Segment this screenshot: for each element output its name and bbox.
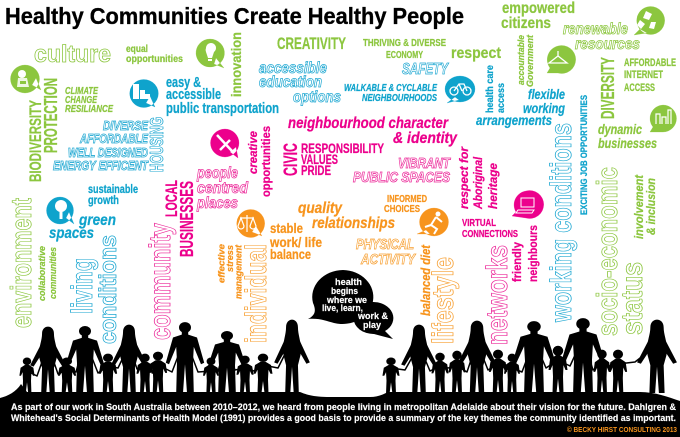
label: culture: culture — [34, 41, 111, 68]
text: walkable and cyclable neighbourhoods: NEIGHBOURHOODS — [362, 92, 437, 104]
callout: health begins speech bubbles: health — [335, 277, 362, 288]
icon: hanger bubble — [547, 45, 576, 74]
text: effective stress management — [216, 243, 244, 299]
text: civic responsibility values pride — [281, 141, 384, 178]
black ground band — [0, 384, 680, 437]
text: equal opportunities — [126, 43, 183, 65]
text: equal opportunities: opportunities — [126, 53, 183, 65]
text: diverse affordable housing: ENERGY EFFICENT — [53, 158, 149, 173]
text: friendly neighbours: friendly — [510, 242, 524, 282]
icon: recycle bubble — [634, 6, 665, 35]
text: effective stress management: effective — [216, 243, 228, 283]
text: easy and accessible public transportation — [166, 75, 279, 117]
text: easy and accessible public transportation: public transportation — [166, 101, 279, 117]
text: footer paragraph — [11, 402, 676, 424]
silhouettes: left group of families holding hands — [19, 320, 310, 393]
text: virtual connections — [462, 218, 518, 240]
label: biodiversity protection: PROTECTION — [41, 78, 61, 153]
label: respect: respect — [451, 45, 502, 62]
text: friendly neighbours: neighbours — [526, 225, 540, 282]
callout: health begins speech bubbles: live, learn, — [322, 303, 363, 314]
text: involvement and inclusion: involvement — [632, 174, 646, 239]
text: creative opportunities — [248, 126, 273, 197]
label: socio-economic status — [592, 167, 649, 336]
text: accountable government: accountable — [516, 35, 526, 85]
text: renewable resources: renewable — [563, 21, 628, 38]
icon: runner bubble — [417, 208, 448, 236]
text: balanced diet: balanced diet — [419, 244, 433, 316]
text: easy and accessible public transportation: easy & — [166, 75, 201, 91]
callout: health begins speech bubbles: play — [363, 320, 382, 331]
label: safety: SAFETY — [402, 61, 449, 78]
icon: bike bubble — [445, 76, 475, 103]
text: civic responsibility values pride: PRIDE — [301, 163, 331, 178]
icon: chart bubble — [650, 105, 676, 132]
text: respect for aboriginal heritage: heritage — [486, 163, 500, 209]
heading: neighbourhood character and identity: neighbourhood character — [288, 115, 449, 132]
text: sustainable growth: growth — [88, 193, 119, 207]
label: housing: HOUSING — [147, 117, 167, 172]
callout: health begins speech bubbles — [308, 270, 393, 339]
text: flexible working arrangements: working — [523, 100, 565, 116]
text: health care access: access — [496, 83, 507, 113]
label: local businesses — [163, 180, 197, 257]
text: stable work life balance — [269, 220, 322, 262]
label: biodiversity protection: BIODIVERSITY — [27, 100, 45, 182]
title: Healthy Communities Create Healthy People — [5, 3, 464, 29]
text: thriving and diverse economy: THRIVING & DIVERSE — [363, 37, 446, 49]
label: green spaces: spaces — [49, 225, 94, 242]
text: stable work life balance: stable — [270, 220, 303, 236]
label: local businesses: LOCAL — [163, 180, 181, 217]
text: flexible working arrangements — [476, 86, 565, 128]
text: involvement and inclusion — [632, 174, 658, 239]
text: climate change resiliance: RESILIANCE — [65, 103, 114, 115]
text: respect for aboriginal heritage: Aboriginal — [471, 156, 485, 210]
text: effective stress management: stress — [225, 245, 236, 272]
text: friendly neighbours — [510, 225, 540, 282]
heading: neighbourhood character and identity — [288, 115, 458, 147]
text: walkable and cyclable neighbourhoods: WALKABLE & CYCLABLE — [344, 82, 438, 94]
text: collaborative communities: communities — [48, 247, 58, 299]
label: empowered citizens: empowered — [502, 0, 575, 17]
icon: laptop bubble — [512, 191, 544, 218]
text: creative opportunities: opportunities — [261, 126, 273, 197]
icon: scales bubble — [237, 209, 265, 238]
text: accessible education options: accessible — [259, 60, 327, 77]
text: civic responsibility values pride: VALUES — [301, 152, 338, 167]
label: green spaces: green — [78, 212, 116, 229]
label: community: community — [144, 223, 177, 340]
text: climate change resiliance: CHANGE — [65, 94, 98, 106]
text: informed choices — [384, 193, 427, 215]
text: sustainable growth: sustainable — [88, 182, 138, 196]
text: flexible working arrangements: flexible — [528, 86, 565, 102]
label: creativity: CREATIVITY — [277, 35, 346, 53]
label: working conditions: working conditions — [545, 123, 578, 323]
text: vibrant public spaces: VIBRANT — [398, 155, 451, 172]
text: diverse affordable housing: DIVERSE — [103, 118, 148, 133]
text: accountable government — [516, 34, 535, 87]
callout: health begins speech bubbles: where we — [326, 295, 367, 306]
label: biodiversity protection — [27, 78, 61, 182]
text: people centred places: places — [196, 195, 238, 212]
label: local businesses: BUSINESSES — [177, 181, 197, 257]
text: effective stress management: management — [234, 244, 244, 299]
text: affordable internet access: ACCESS — [624, 82, 655, 94]
text: dynamic businesses: dynamic — [598, 122, 642, 137]
text: quality relationships — [298, 200, 395, 232]
text: vibrant public spaces — [353, 155, 451, 186]
text: people centred places — [196, 165, 249, 212]
text: virtual connections: VIRTUAL — [462, 218, 496, 229]
text: informed choices: INFORMED — [387, 193, 427, 205]
text: climate change resiliance — [65, 85, 114, 115]
label: lifestyle: lifestyle — [427, 257, 460, 344]
icon: buildings bubble — [130, 80, 158, 108]
icon: lightbulb bubble — [196, 39, 224, 68]
text: collaborative communities — [37, 246, 58, 301]
label: individual: individual — [240, 244, 273, 343]
label: networks: networks — [481, 245, 514, 345]
text: easy and accessible public transportation: accessible — [166, 87, 221, 103]
text: involvement and inclusion: & inclusion — [644, 178, 658, 235]
label: socio-economic status: socio-economic — [592, 167, 624, 336]
text: people centred places: people — [196, 165, 238, 182]
text: thriving and diverse economy — [363, 37, 446, 61]
text: vibrant public spaces: PUBLIC SPACES — [353, 169, 450, 186]
icon: koala bubble — [10, 65, 41, 93]
text: physical activity: PHYSICAL — [356, 236, 414, 253]
text: exciting job opportunities: EXCITING JOB OPPORTUNITIES — [579, 95, 590, 215]
text: accessible education options — [259, 60, 341, 106]
heading: neighbourhood character and identity: & identity — [393, 130, 458, 147]
label: environment: environment — [6, 198, 38, 328]
text: physical activity: ACTIVITY — [360, 251, 417, 268]
label: innovation: innovation — [228, 32, 244, 97]
text: diverse affordable housing — [53, 118, 149, 173]
text: informed choices: CHOICES — [384, 203, 420, 215]
text: creative opportunities: creative — [248, 130, 260, 174]
text: climate change resiliance: CLIMATE — [65, 85, 99, 97]
text: flexible working arrangements: arrangements — [476, 112, 552, 128]
text: diverse affordable housing: AFFORDABLE — [79, 131, 148, 146]
text: renewable resources: resources — [575, 36, 640, 53]
text: accountable government: Government — [525, 34, 535, 87]
text: accessible education options: options — [293, 89, 341, 106]
text: civic responsibility values pride: RESPONSIBILITY — [301, 141, 384, 156]
icon: tree bubble — [47, 197, 74, 224]
label: living conditions: living — [66, 258, 99, 314]
text: stable work life balance: work/ life — [269, 234, 322, 250]
text: respect for aboriginal heritage — [457, 146, 500, 210]
text: equal opportunities: equal — [126, 43, 148, 55]
text: physical activity — [356, 236, 417, 268]
text: health care access — [485, 65, 507, 113]
label: living conditions: conditions — [95, 235, 122, 344]
label: empowered citizens — [501, 0, 575, 32]
label: empowered citizens: citizens — [501, 15, 551, 32]
text: affordable internet access — [624, 57, 676, 94]
text: health care access: health care — [485, 65, 496, 113]
text: quality relationships: quality — [298, 200, 343, 217]
label: living conditions — [66, 235, 122, 344]
icon: tools bubble — [210, 129, 239, 158]
text: virtual connections: CONNECTIONS — [462, 229, 518, 240]
text: dynamic businesses: businesses — [598, 136, 657, 151]
callout: health begins speech bubbles: work & — [357, 311, 388, 322]
text: diverse affordable housing: WELL DESIGNED — [68, 145, 148, 160]
text: sustainable growth — [88, 182, 138, 207]
text: affordable internet access: INTERNET — [624, 69, 663, 81]
silhouettes: right group of families holding hands — [382, 318, 677, 393]
text: thriving and diverse economy: ECONOMY — [386, 49, 423, 61]
text: stable work life balance: balance — [270, 246, 311, 262]
text: renewable resources — [563, 21, 640, 53]
text: walkable and cyclable neighbourhoods — [344, 82, 438, 104]
text: collaborative communities: collaborative — [37, 246, 47, 301]
label: socio-economic status: status — [616, 262, 649, 335]
text: dynamic businesses — [598, 122, 657, 151]
callout: health begins speech bubbles: begins — [331, 286, 358, 297]
text: people centred places: centred — [197, 180, 249, 197]
label: green spaces — [49, 212, 116, 242]
text: accessible education options: education — [259, 74, 322, 91]
text: civic responsibility values pride: CIVIC — [281, 143, 302, 176]
label: diversity: DIVERSITY — [598, 57, 618, 119]
text: respect for aboriginal heritage: respect for — [457, 146, 471, 209]
text: quality relationships: relationships — [312, 215, 395, 232]
